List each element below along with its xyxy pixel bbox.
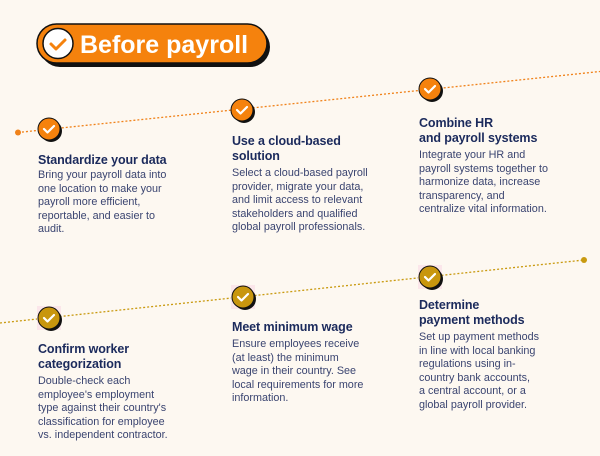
title pill bbox=[37, 24, 270, 67]
text: confirm: Double-check each bbox=[38, 375, 130, 387]
heading: confirm: Confirm worker bbox=[38, 342, 129, 356]
text: confirm: type against their country's bbox=[38, 402, 166, 414]
icon: check 2 bbox=[231, 99, 255, 123]
text: cloud: provider, migrate your data, bbox=[232, 181, 363, 193]
text: cloud: Select a cloud-based payroll bbox=[232, 167, 368, 179]
icon: check 3 bbox=[419, 78, 443, 102]
heading: combine bbox=[419, 116, 537, 145]
text: confirm: vs. independent contractor. bbox=[38, 429, 168, 441]
text: standardize: payroll more efficient, bbox=[38, 196, 140, 208]
heading: standardize: Standardize your data bbox=[38, 153, 166, 167]
text: combine: payroll systems together to bbox=[419, 163, 548, 175]
text: payment: regulations using in- bbox=[419, 358, 516, 370]
text: minimum wage bbox=[232, 338, 363, 404]
heading: cloud bbox=[232, 134, 341, 163]
text: combine: centralize vital information. bbox=[419, 203, 547, 215]
text: payment bbox=[419, 331, 539, 411]
text: minimum wage: (at least) the minimum bbox=[232, 352, 339, 364]
title pill: Before payroll bbox=[80, 31, 248, 59]
heading: payment bbox=[419, 298, 524, 327]
heading: confirm bbox=[38, 342, 129, 371]
heading: payment: Determine bbox=[419, 298, 479, 312]
text: combine bbox=[419, 149, 548, 215]
icon: check 6 bbox=[418, 265, 443, 290]
text: payment: country bank accounts, bbox=[419, 372, 530, 384]
icon: check 5 bbox=[231, 285, 256, 310]
text: combine: harmonize data, increase bbox=[419, 176, 540, 188]
heading: payment: payment methods bbox=[419, 313, 524, 327]
text: minimum wage: Ensure employees receive bbox=[232, 338, 359, 350]
heading: combine: and payroll systems bbox=[419, 131, 537, 145]
text: cloud: global payroll professionals. bbox=[232, 221, 365, 233]
heading: combine: Combine HR bbox=[419, 116, 493, 130]
text: cloud: stakeholders and qualified bbox=[232, 208, 357, 220]
timeline top bbox=[15, 72, 600, 136]
text: standardize bbox=[38, 169, 166, 235]
icon: check 1 bbox=[38, 118, 62, 142]
heading: confirm: categorization bbox=[38, 357, 121, 371]
timeline bottom bbox=[0, 257, 587, 323]
text: payment: a central account, or a bbox=[419, 385, 526, 397]
text: payment: Set up payment methods bbox=[419, 331, 539, 343]
text: confirm bbox=[38, 375, 168, 441]
text: cloud: and limit access to relevant bbox=[232, 194, 362, 206]
text: standardize: audit. bbox=[38, 223, 64, 235]
icon: check 4 bbox=[37, 306, 62, 331]
text: standardize: one location to make your bbox=[38, 183, 162, 195]
text: payment: global payroll provider. bbox=[419, 399, 527, 411]
text: minimum wage: wage in their country. See bbox=[232, 365, 356, 377]
text: confirm: employee's employment bbox=[38, 389, 154, 401]
text: confirm: classification for employee bbox=[38, 416, 165, 428]
heading: minimum wage: Meet minimum wage bbox=[232, 320, 353, 334]
text: standardize: Bring your payroll data into bbox=[38, 169, 166, 181]
text: minimum wage: information. bbox=[232, 392, 288, 404]
text: cloud bbox=[232, 167, 368, 233]
text: payment: in line with local banking bbox=[419, 345, 535, 357]
heading: cloud: solution bbox=[232, 149, 280, 163]
heading: cloud: Use a cloud-based bbox=[232, 134, 341, 148]
text: standardize: reportable, and easier to bbox=[38, 210, 155, 222]
text: minimum wage: local requirements for more bbox=[232, 379, 363, 391]
text: combine: transparency, and bbox=[419, 190, 505, 202]
text: combine: Integrate your HR and bbox=[419, 149, 525, 161]
